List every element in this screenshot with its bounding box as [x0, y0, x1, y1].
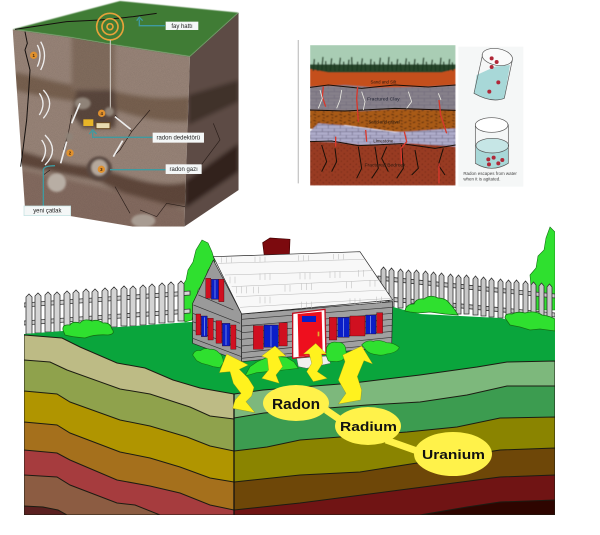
- front right windows: [329, 313, 383, 340]
- fault line and cracks: [15, 13, 220, 217]
- left fence: [24, 281, 190, 334]
- numbered markers: 2: [69, 151, 72, 156]
- decay chain connectors: [326, 410, 420, 452]
- right fence: [378, 267, 555, 323]
- teal leader lines: [43, 17, 166, 207]
- numbered markers: 1: [32, 53, 35, 58]
- detector cable: [109, 40, 112, 110]
- front wall: [242, 302, 393, 362]
- section divider line: [233, 394, 235, 515]
- strata labels: Sand and Silt: [370, 79, 397, 84]
- glass with still water: [475, 118, 509, 168]
- house: [193, 238, 399, 413]
- left soil layers: [24, 335, 234, 515]
- front bushes: [193, 341, 399, 376]
- block right face: [184, 12, 239, 226]
- roof: [213, 252, 393, 314]
- label: radon dedektörü: [153, 133, 204, 143]
- lawn: [24, 307, 555, 394]
- label: fay hattı: [166, 22, 198, 30]
- roof shingles: [218, 254, 392, 308]
- numbered markers: [30, 52, 105, 173]
- grass top surface: [13, 1, 239, 57]
- Uranium bubble: [414, 432, 492, 476]
- Radon bubble: [263, 385, 329, 421]
- radon detector: [83, 119, 110, 129]
- chimney: [263, 238, 290, 256]
- gable lower windows: [196, 314, 236, 349]
- white migration arrows: [61, 103, 131, 163]
- strata labels: [364, 79, 406, 169]
- gable side wall: [193, 260, 242, 362]
- glass caption: Radon escapes from water: [463, 171, 517, 176]
- seismic waves: [37, 42, 52, 165]
- front left window: [253, 323, 287, 349]
- numbered markers: 4: [100, 111, 103, 116]
- label: fay hattı: fay hattı: [171, 24, 193, 30]
- left tree: [180, 240, 215, 322]
- glass caption: when it is agitated.: [463, 177, 500, 182]
- right soil layers: [234, 361, 555, 515]
- strata labels: Sand and gravel: [369, 119, 400, 124]
- soil strata diagram: [310, 45, 456, 186]
- glass with agitated water: [474, 46, 514, 100]
- radon arrows: [219, 343, 373, 413]
- window mullions: [204, 280, 371, 347]
- label: radon gazı: [166, 164, 202, 174]
- glasses backdrop: [458, 47, 523, 187]
- back bushes: [63, 296, 555, 338]
- seismic focus rings: [97, 13, 123, 40]
- numbered markers: 3: [100, 167, 103, 172]
- label: radon dedektörü: radon dedektörü: [157, 136, 200, 142]
- strata labels: Fractured Clay: [367, 97, 400, 103]
- panel: soil cross-section and water glasses: [298, 40, 523, 187]
- door steps: [297, 356, 331, 368]
- Uranium bubble: Uranium: [422, 447, 485, 462]
- strata labels: Limestone: [373, 138, 394, 143]
- label: yeni çatlak: yeni çatlak: [33, 209, 61, 215]
- grass blades: [313, 57, 453, 71]
- right tree: [530, 227, 555, 310]
- door: [293, 309, 326, 358]
- block front face: [12, 30, 190, 227]
- radon gas clouds: [47, 97, 155, 227]
- panel: house over soil layers: [24, 227, 555, 515]
- Radium bubble: Radium: [340, 419, 397, 434]
- panel: earthquake fault block diagram: [3, 1, 247, 233]
- label: radon gazı: radon gazı: [170, 167, 198, 173]
- Radium bubble: [335, 407, 401, 445]
- wall siding: [193, 283, 393, 358]
- gable upper window: [206, 278, 224, 302]
- label: yeni çatlak: [24, 206, 71, 216]
- strata labels: Fractured Bedrock: [364, 163, 406, 169]
- Radon bubble: Radon: [272, 397, 320, 413]
